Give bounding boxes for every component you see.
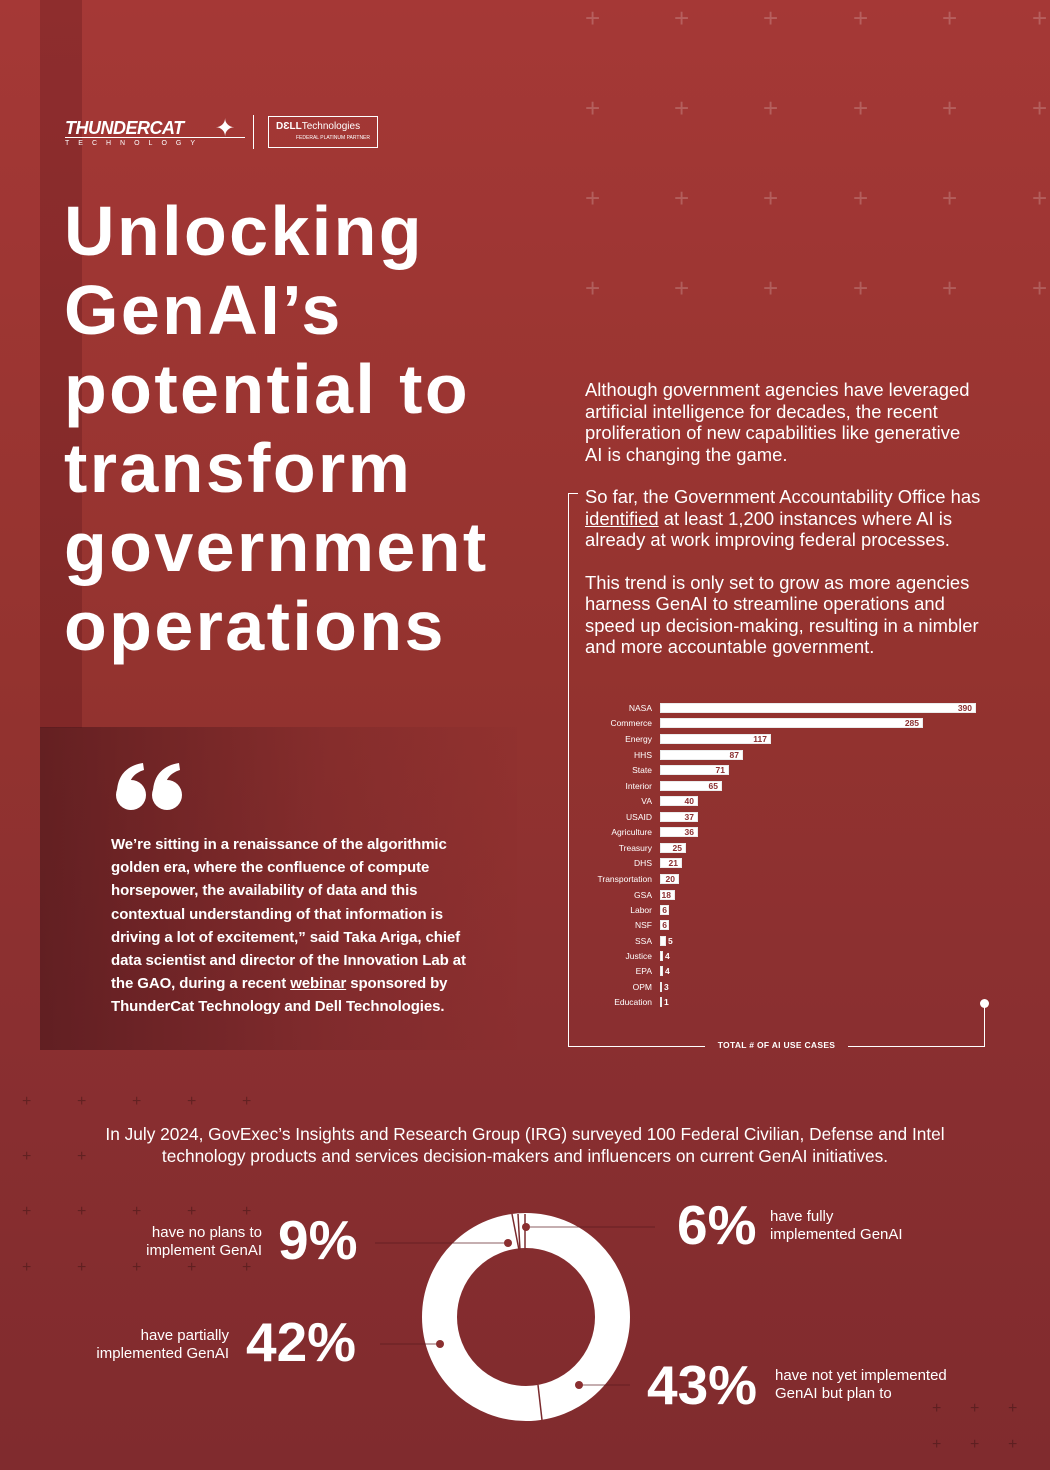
title: Unlocking GenAI’s potential to transform government operations xyxy=(64,192,489,665)
background plus pattern: + xyxy=(1032,93,1047,123)
logo: thundercat xyxy=(65,118,245,147)
background plus pattern: + xyxy=(585,3,600,33)
background plus pattern: + xyxy=(242,1259,251,1276)
background plus pattern: + xyxy=(77,1259,86,1276)
text: DHS xyxy=(634,858,652,868)
intro text: This trend is only set to grow as more agencies harness GenAI to streamline operations and speed up decision-making, resulting in a nimbler and more accountable government. xyxy=(585,572,979,657)
stat: 9%: 9% xyxy=(278,1209,358,1271)
text: SSA xyxy=(635,936,652,946)
background plus pattern: + xyxy=(187,1259,196,1276)
background plus pattern: + xyxy=(187,1203,196,1220)
text: 36 xyxy=(685,827,694,837)
background plus pattern: + xyxy=(132,1259,141,1276)
text: Justice xyxy=(626,951,652,961)
stat: 6%: have fully xyxy=(770,1208,833,1225)
text: VA xyxy=(641,796,652,806)
survey intro: In July 2024, GovExec’s Insights and Research Group (IRG) surveyed 100 Federal Civilian, Defense and Intel technology products and services decision-makers and influencers on current GenAI initiatives. xyxy=(105,1124,945,1166)
text: Education xyxy=(614,997,652,1007)
text: 6 xyxy=(662,905,667,915)
stat: 43%: have not yet implemented xyxy=(775,1367,947,1384)
stat: 9% xyxy=(146,1209,358,1271)
background plus pattern: + xyxy=(674,183,689,213)
stat: 42% xyxy=(96,1311,356,1373)
background plus pattern: + xyxy=(132,1093,141,1110)
text: USAID xyxy=(626,812,652,822)
background plus pattern: + xyxy=(763,3,778,33)
text: 3 xyxy=(664,982,669,992)
background plus pattern: + xyxy=(763,93,778,123)
stat: 43% xyxy=(647,1354,947,1416)
text: Agriculture xyxy=(611,827,652,837)
background plus pattern: + xyxy=(970,1400,979,1417)
text: EPA xyxy=(636,966,652,976)
chart frame xyxy=(568,493,578,1047)
text: 6 xyxy=(662,920,667,930)
text: Treasury xyxy=(619,843,652,853)
background plus pattern: + xyxy=(22,1259,31,1276)
logo: dell: DƐLLTechnologies xyxy=(276,121,360,132)
text: 1 xyxy=(664,997,669,1007)
donut chart xyxy=(375,1213,655,1421)
bar chart xyxy=(590,700,980,1010)
background plus pattern: + xyxy=(853,183,868,213)
text: 4 xyxy=(665,951,670,961)
text: NASA xyxy=(629,703,652,713)
background plus pattern: + xyxy=(942,93,957,123)
text: 25 xyxy=(673,843,682,853)
text: GSA xyxy=(634,890,652,900)
background plus pattern: + xyxy=(1008,1400,1017,1417)
background plus pattern: + xyxy=(932,1400,941,1417)
background plus pattern: + xyxy=(585,273,600,303)
icon: quote mark xyxy=(116,763,182,810)
background plus pattern: + xyxy=(970,1436,979,1453)
background plus pattern: + xyxy=(187,1093,196,1110)
text: 37 xyxy=(685,812,694,822)
text: 20 xyxy=(666,874,675,884)
intro text: So far, the Government Accountability Office has identified at least 1,200 instances where AI is already at work improving federal processes. xyxy=(585,486,980,550)
text: OPM xyxy=(633,982,652,992)
background plus pattern: + xyxy=(22,1203,31,1220)
stat: 6%: implemented GenAI xyxy=(770,1226,903,1243)
background plus pattern: + xyxy=(585,93,600,123)
logo: thundercat: TECHNOLOGY xyxy=(65,140,204,147)
background plus pattern: + xyxy=(853,3,868,33)
stat: 42%: have partially implemented GenAI xyxy=(96,1327,229,1362)
logo: dell xyxy=(268,116,378,148)
text: 18 xyxy=(662,890,671,900)
stat: 42%: 42% xyxy=(246,1311,356,1373)
text: 87 xyxy=(730,750,739,760)
stat: 43%: GenAI but plan to xyxy=(775,1385,892,1402)
background plus pattern: + xyxy=(1032,3,1047,33)
intro text: Although government agencies have leveraged artificial intelligence for decades, the recent proliferation of new capabilities like generative xyxy=(585,379,969,443)
logo: thundercat: THUNDERCAT xyxy=(65,118,184,138)
text: HHS xyxy=(634,750,652,760)
quote text: We’re sitting in a renaissance of the algorithmic golden era, where the confluence of compute horsepower, the availability of data and this contextual understanding of that information is driving a lot of excitement,” said Taka Ariga, chief data scientist and director of the Innovation Lab at the GAO, during a recent webinar sponsored by ThunderCat Technology and Dell Technologies. xyxy=(111,836,466,1015)
stat: 6%: 6% xyxy=(677,1194,756,1256)
left stripe xyxy=(40,0,82,728)
background plus pattern: + xyxy=(1032,183,1047,213)
background plus pattern: + xyxy=(585,183,600,213)
background plus pattern: + xyxy=(674,93,689,123)
text: Labor xyxy=(630,905,652,915)
text: 21 xyxy=(669,858,678,868)
text: 5 xyxy=(668,936,673,946)
text: 65 xyxy=(709,781,718,791)
text: 4 xyxy=(665,966,670,976)
text: Interior xyxy=(626,781,652,791)
intro text xyxy=(585,379,980,657)
text: 71 xyxy=(716,765,725,775)
background plus pattern: + xyxy=(1032,273,1047,303)
background plus pattern: + xyxy=(77,1203,86,1220)
background plus pattern: + xyxy=(77,1148,86,1165)
stat: 43%: 43% xyxy=(647,1354,757,1416)
text: 117 xyxy=(753,734,767,744)
background plus pattern: + xyxy=(132,1203,141,1220)
chart axis label: TOTAL # OF AI USE CASES xyxy=(718,1040,835,1050)
stat: 6% xyxy=(677,1194,903,1256)
logo: dell: FEDERAL PLATINUM PARTNER xyxy=(296,135,370,141)
background plus pattern: + xyxy=(22,1093,31,1110)
background plus pattern: + xyxy=(942,3,957,33)
quote panel xyxy=(40,727,517,1050)
background plus pattern: + xyxy=(242,1203,251,1220)
background plus pattern: + xyxy=(674,3,689,33)
text: State xyxy=(632,765,652,775)
background plus pattern: + xyxy=(242,1093,251,1110)
background plus pattern: + xyxy=(22,1148,31,1165)
text: Transportation xyxy=(598,874,652,884)
text: 285 xyxy=(905,718,919,728)
intro text: AI is changing the game. xyxy=(585,444,787,464)
text: NSF xyxy=(635,920,652,930)
text: Energy xyxy=(625,734,652,744)
text: 40 xyxy=(685,796,694,806)
background plus pattern: + xyxy=(763,183,778,213)
text: 390 xyxy=(958,703,972,713)
stat: 9%: have no plans to implement GenAI xyxy=(146,1224,262,1259)
text: Commerce xyxy=(610,718,652,728)
background plus pattern: + xyxy=(942,273,957,303)
background plus pattern: + xyxy=(932,1436,941,1453)
background plus pattern: + xyxy=(77,1093,86,1110)
background plus pattern: + xyxy=(853,93,868,123)
background plus pattern: + xyxy=(853,273,868,303)
background plus pattern: + xyxy=(1008,1436,1017,1453)
logos: ✦ xyxy=(215,115,235,142)
background plus pattern: + xyxy=(674,273,689,303)
background plus pattern: + xyxy=(763,273,778,303)
logos xyxy=(65,115,378,149)
background plus pattern: + xyxy=(942,183,957,213)
